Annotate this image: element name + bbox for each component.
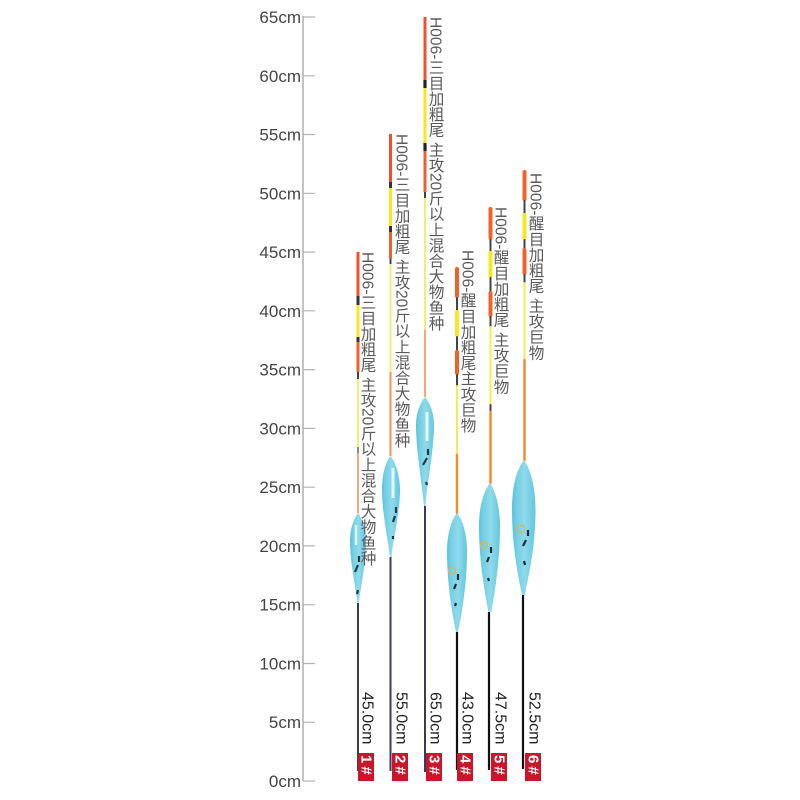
ruler scale xyxy=(259,8,315,791)
float 2 xyxy=(382,134,410,781)
ruler scale: 5cm xyxy=(269,713,301,732)
ruler scale: 35cm xyxy=(259,361,301,380)
float 3 length: 65.0cm xyxy=(426,692,444,744)
ruler scale: 45cm xyxy=(259,243,301,262)
ruler scale: 50cm xyxy=(259,184,301,203)
float 5 xyxy=(479,207,509,781)
float 3 stem xyxy=(424,506,426,772)
float 4 length: 43.0cm xyxy=(458,692,476,744)
float 2 stem xyxy=(390,557,392,771)
ruler scale: 15cm xyxy=(259,596,301,615)
float 1 description: H006-三目加粗尾 主攻20斤以上混合大物鱼种 xyxy=(358,252,376,566)
float 6 xyxy=(512,172,544,781)
float 5 length: 47.5cm xyxy=(492,692,508,744)
ruler scale: 30cm xyxy=(259,419,301,438)
float 6 stem xyxy=(522,595,524,769)
ruler scale: 60cm xyxy=(259,67,301,86)
float 3 xyxy=(416,17,444,781)
float 5 stem xyxy=(488,612,490,770)
ruler scale: 25cm xyxy=(259,478,301,497)
float 4 description: H006-醒目加粗尾主攻巨物 xyxy=(458,250,476,434)
ruler scale: 55cm xyxy=(259,126,301,144)
float 4 xyxy=(447,250,476,781)
float 4 stem xyxy=(456,632,458,770)
float 2 body xyxy=(382,456,400,557)
float 2 length: 55.0cm xyxy=(392,692,410,744)
float 1 body xyxy=(350,513,366,603)
ruler scale: 10cm xyxy=(259,654,301,674)
float 1 stem xyxy=(357,603,359,771)
float 1 length: 45.0cm xyxy=(358,692,376,744)
float 1 antenna xyxy=(356,252,360,513)
float 2 description: H006-三目加粗尾 主攻20斤以上混合大物鱼种 xyxy=(392,134,410,448)
float 1 badge: 1# xyxy=(358,755,374,778)
float 3 body xyxy=(416,397,434,506)
float 5 body xyxy=(479,483,500,612)
float 5 badge: 5# xyxy=(490,755,508,778)
float 6 badge: 6# xyxy=(524,755,542,778)
float 6 description: H006-醒目加粗尾 主攻巨物 xyxy=(526,173,544,361)
float 5 description: H006-醒目加粗尾 主攻巨物 xyxy=(492,207,509,395)
ruler scale: 40cm xyxy=(259,302,301,321)
float 3 antenna xyxy=(424,17,426,397)
float 4 antenna xyxy=(455,269,459,513)
float 5 antenna xyxy=(488,209,492,483)
float 6 length: 52.5cm xyxy=(526,692,542,744)
ruler scale: 20cm xyxy=(259,537,301,556)
float 3 badge: 3# xyxy=(426,755,442,778)
float 2 badge: 2# xyxy=(392,755,408,778)
ruler scale: 65cm xyxy=(259,8,301,27)
float 4 body xyxy=(447,513,467,632)
float 2 antenna xyxy=(389,134,392,456)
float 4 badge: 4# xyxy=(456,755,474,778)
ruler scale: 0cm xyxy=(269,772,301,791)
float 6 body xyxy=(512,460,536,595)
float 3 description: H006-三目加粗尾 主攻20斤以上混合大物鱼种 xyxy=(426,17,444,331)
float 1 xyxy=(350,252,376,781)
float 6 antenna xyxy=(522,172,526,460)
